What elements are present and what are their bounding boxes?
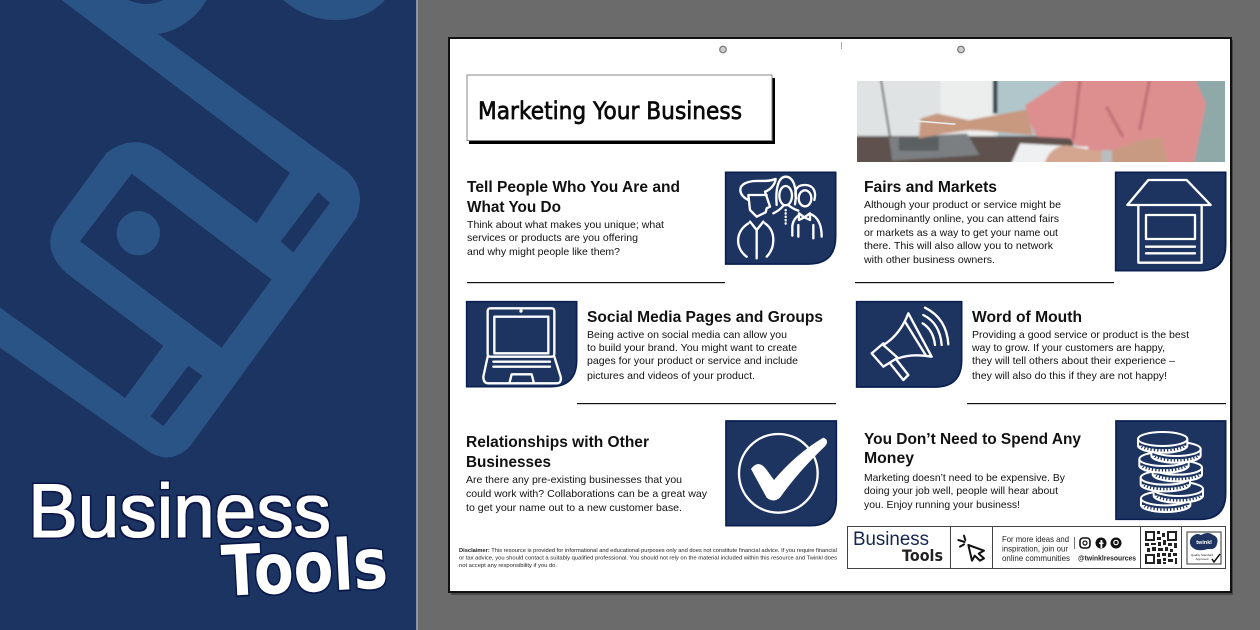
section: You Don't Need to Spend Any Money: Marketing doesn’t need to be expensive. By [864, 472, 1066, 484]
icon: cursor click [958, 536, 984, 561]
community text: inspiration, join our [1002, 544, 1068, 554]
section: Word of Mouth: they will also do this if they are not happy! [972, 370, 1167, 382]
disclaimer: or tax advice, you should contact a suitably qualified professional. You should not rely on the material included within this resource and Twinkl does [459, 556, 837, 562]
section: Relationships with Other Businesses [466, 421, 836, 526]
section: Relationships with Other Businesses: could work with? Collaborations can be a great way [466, 488, 708, 500]
heading: Business: Business [28, 469, 331, 554]
section: Word of Mouth: Providing a good service or product is the best [972, 329, 1189, 341]
section: Social Media Pages and Groups: Social Media Pages and Groups [587, 309, 823, 326]
disclaimer: Disclaimer: This resource is provided for informational and educational purposes only and does not constitute financial advice. If you require financial [459, 548, 837, 554]
section: Fairs and Markets: with other business owners. [863, 254, 995, 266]
QR code [1145, 531, 1177, 564]
section: You Don't Need to Spend Any Money: doing your job well, people will hear about [864, 485, 1058, 497]
section: Tell People Who You Are and What You Do: Tell People Who You Are and [467, 179, 680, 196]
community text: @twinklresources [1078, 556, 1136, 562]
badge: twinkl approved: twinkl [1196, 540, 1212, 546]
disclaimer [459, 548, 837, 569]
section: Tell People Who You Are and What You Do: Think about what makes you unique; what [467, 219, 664, 231]
badge: twinkl approved: Approved [1196, 557, 1209, 561]
section: Social Media Pages and Groups: to build your brand. You might want to create [587, 342, 797, 354]
section: Relationships with Other Businesses: to get your name out to a new customer base. [466, 502, 682, 514]
community text [1002, 534, 1136, 563]
section: Social Media Pages and Groups [467, 302, 836, 404]
section: Fairs and Markets [855, 172, 1226, 283]
section: Fairs and Markets: there. This will also allow you to network [864, 240, 1054, 252]
title box [467, 75, 775, 144]
community text: For more ideas and [1002, 534, 1069, 544]
icon: coin stack [1116, 421, 1226, 519]
icon: check mark [726, 421, 836, 526]
section: Fairs and Markets: predominantly online, you can attend fairs [864, 213, 1059, 225]
social icons [1074, 537, 1122, 549]
panel: document page [449, 38, 1233, 595]
section: Tell People Who You Are and What You Do: What You Do [467, 199, 561, 216]
panel: left sidebar [0, 0, 418, 630]
icon: laptop [467, 302, 577, 387]
photo: person at laptop [857, 81, 1225, 162]
heading: Tools: Tools [220, 522, 390, 613]
section: You Don't Need to Spend Any Money [864, 421, 1226, 519]
title box: Marketing Your Business [478, 97, 742, 125]
footer logo: Business Tools: Tools [902, 546, 943, 565]
section: You Don't Need to Spend Any Money: you. Enjoy running your business! [864, 499, 1020, 511]
section: Fairs and Markets: Although your product or service might be [864, 199, 1061, 211]
disclaimer: not accept any responsibility if you do. [459, 563, 557, 569]
community text: online communities [1002, 553, 1070, 563]
footer logo: Business Tools [853, 529, 943, 565]
icon: people [726, 172, 836, 264]
badge: twinkl approved: Quality Standard [1191, 553, 1213, 557]
section: Tell People Who You Are and What You Do [467, 172, 836, 283]
section: Fairs and Markets: or markets as a way to get your name out [864, 227, 1058, 239]
section: Word of Mouth: way to grow. If your customers are happy, [971, 342, 1165, 354]
footer bar [848, 526, 1226, 568]
section: Word of Mouth: Word of Mouth [972, 309, 1082, 326]
section: Social Media Pages and Groups: Being active on social media can allow you [587, 329, 787, 341]
section: Relationships with Other Businesses: Businesses [466, 454, 551, 471]
section: Word of Mouth: they will tell others about their experience – [972, 355, 1175, 367]
badge: twinkl approved [1187, 532, 1221, 564]
section: Word of Mouth [857, 302, 1226, 404]
section: Relationships with Other Businesses: Relationships with Other [466, 434, 649, 451]
section: You Don't Need to Spend Any Money: Money [864, 450, 914, 467]
icon: tilted phone background [0, 0, 385, 457]
section: Fairs and Markets: Fairs and Markets [864, 179, 997, 196]
section: Tell People Who You Are and What You Do: services or products are you offering [467, 232, 638, 244]
icon: market stall [1116, 172, 1226, 271]
section: Relationships with Other Businesses: Are there any pre-existing businesses that you [466, 474, 682, 486]
section: Social Media Pages and Groups: pages for your product or service and include [587, 355, 798, 367]
icon: megaphone [857, 302, 962, 387]
section: Social Media Pages and Groups: pictures and videos of your product. [587, 370, 755, 382]
section: You Don't Need to Spend Any Money: You Don’t Need to Spend Any [864, 431, 1081, 448]
section: Tell People Who You Are and What You Do: and why might people like them? [467, 246, 620, 258]
footer logo: Business Tools: Business [853, 529, 929, 550]
